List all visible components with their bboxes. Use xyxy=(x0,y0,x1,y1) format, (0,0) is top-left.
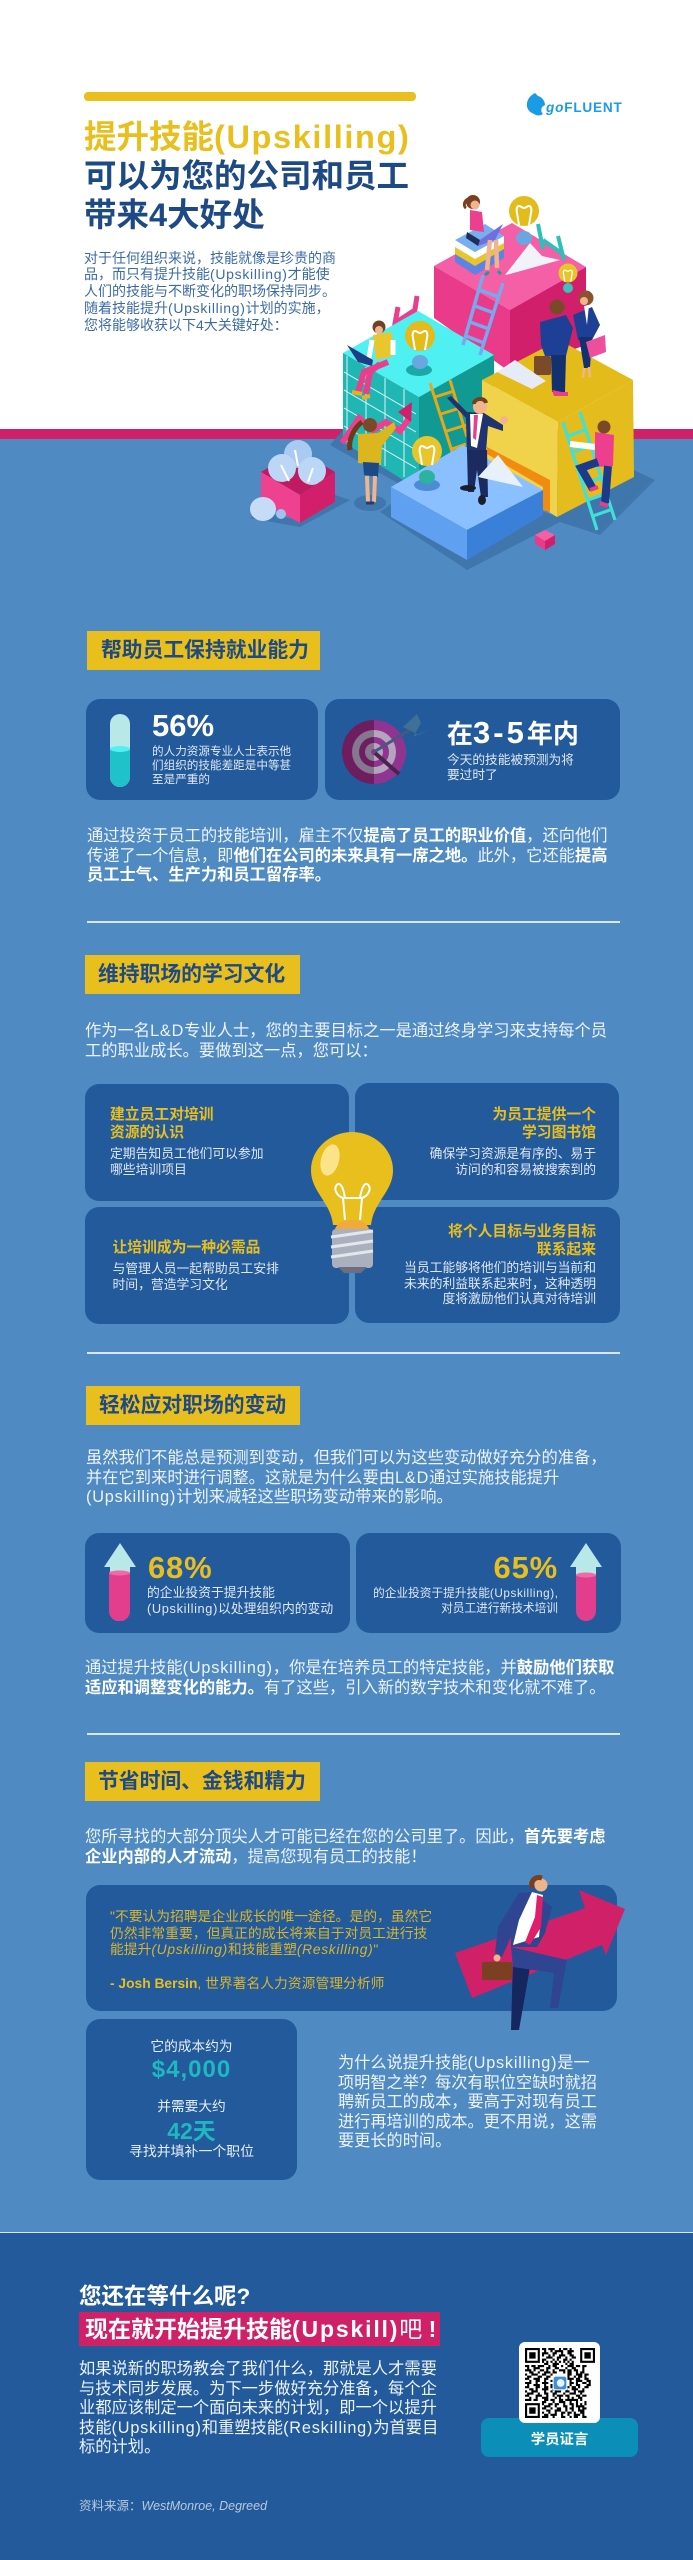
yellow title bar xyxy=(84,92,416,101)
intro text: 您将能够收获以下4大关键好处： xyxy=(84,317,288,333)
footer panel xyxy=(0,2232,693,2560)
card heading xyxy=(492,1106,596,1141)
paragraph xyxy=(85,1658,614,1697)
hero illustration: isometric blocks with people xyxy=(250,195,655,570)
title xyxy=(84,118,410,232)
teal ladder on pink cube xyxy=(538,224,564,260)
stat description xyxy=(152,745,291,786)
person: presenter in navy suit xyxy=(447,396,508,505)
person: two colleagues shaking hands xyxy=(534,290,606,396)
heading: 帮助员工保持就业能力 xyxy=(101,639,309,662)
card: library xyxy=(355,1083,619,1200)
paragraph xyxy=(85,1828,606,1866)
paragraph: 并在它到来时进行调整。这就是为什么要由L&D通过实施技能提升 xyxy=(86,1469,559,1487)
paragraph: 工的职业成长。要做到这一点，您可以： xyxy=(85,1042,378,1060)
card text: 时间，营造学习文化 xyxy=(112,1276,228,1292)
heading: 维持职场的学习文化 xyxy=(98,963,285,986)
icon: arrow gauge xyxy=(104,1543,136,1621)
card: necessity xyxy=(85,1207,349,1324)
icon: arrow gauge xyxy=(570,1543,602,1621)
card heading: 联系起来 xyxy=(537,1242,596,1258)
stat value: 56% xyxy=(152,708,214,743)
footer heading: 您还在等什么呢? xyxy=(79,2284,250,2309)
cost label: 它的成本约为 xyxy=(150,2039,233,2054)
stat card: 68% xyxy=(85,1533,350,1633)
paragraph: 通过提升技能(Upskilling)，你是在培养员工的特定技能，并鼓励他们获取 xyxy=(85,1659,614,1677)
paper plane on pink cube xyxy=(505,243,560,275)
paragraph: 进行再培训的成本。更不用说，这需 xyxy=(338,2113,597,2131)
button: testimonial: 学员证言 xyxy=(531,2432,588,2448)
call to action: 现在就开始提升技能(Upskill)吧 ! xyxy=(85,2316,436,2342)
card text: 确保学习资源是有序的、易于 xyxy=(430,1146,596,1161)
pink ladder behind teal cube xyxy=(394,296,417,329)
pink box with bulbs xyxy=(250,440,335,523)
quote text: 仍然非常重要，但真正的成长将来自于对员工进行技 xyxy=(110,1926,427,1940)
paragraph: 作为一名L&D专业人士，您的主要目标之一是通过终身学习来支持每个员 xyxy=(85,1022,607,1040)
button: testimonial xyxy=(481,2418,638,2457)
card heading: 将个人目标与业务目标 xyxy=(448,1224,596,1240)
paragraph: 通过投资于员工的技能培训，雇主不仅提高了员工的职业价值，还向他们 xyxy=(87,827,608,845)
card text xyxy=(430,1146,596,1176)
paragraph xyxy=(338,2054,597,2150)
paragraph xyxy=(86,1448,606,1506)
stat description xyxy=(373,1586,558,1614)
small pink cube xyxy=(535,530,555,550)
icon: target with arrow xyxy=(342,714,427,784)
illustration: businessman with arrow xyxy=(455,1875,625,2030)
icon: light bulb xyxy=(311,1132,393,1273)
card heading xyxy=(448,1223,596,1258)
teal cube xyxy=(343,311,494,490)
stat description xyxy=(447,752,574,782)
paragraph xyxy=(85,1022,607,1060)
books xyxy=(455,224,504,275)
card heading: 让培训成为一种必需品 xyxy=(112,1240,260,1256)
heading: 轻松应对职场的变动 xyxy=(99,1394,286,1417)
intro text xyxy=(84,250,336,333)
paper plane on blue cube xyxy=(478,455,523,487)
heading xyxy=(86,1386,300,1425)
blue ladder xyxy=(463,275,503,355)
footer paragraph xyxy=(79,2360,438,2456)
cyan ladder xyxy=(563,412,615,530)
blue cube xyxy=(391,445,543,560)
quote text xyxy=(110,1909,432,1957)
stat description: 们组织的技能差距是中等甚 xyxy=(152,759,291,772)
footer paragraph: 业都应该制定一个面向未来的计划，即一个以提升 xyxy=(79,2399,437,2417)
time description: 寻找并填补一个职位 xyxy=(129,2143,254,2159)
intro text: 对于任何组织来说，技能就像是珍贵的商 xyxy=(84,250,336,266)
heading xyxy=(87,631,320,670)
heading: 节省时间、金钱和精力 xyxy=(98,1770,306,1793)
card heading: 资源的认识 xyxy=(110,1125,184,1141)
stat description: 的人力资源专业人士表示他 xyxy=(152,745,291,758)
bulbs xyxy=(405,196,578,491)
paragraph: 企业内部的人才流动，提高您现有员工的技能！ xyxy=(85,1848,427,1866)
stat description: (Upskilling)以处理组织内的变动 xyxy=(147,1600,333,1616)
open book xyxy=(497,360,546,389)
paragraph: 传递了一个信息，即他们在公司的未来具有一席之地。此外，它还能提高 xyxy=(87,847,608,865)
pink cube xyxy=(434,223,586,372)
section 1: employability xyxy=(86,631,620,884)
footer paragraph: 与技术同步发展。为下一步做好充分准备，每个企 xyxy=(79,2380,437,2398)
pink band xyxy=(0,429,693,439)
card text: 度将激励他们认真对待培训 xyxy=(442,1291,596,1306)
card text xyxy=(404,1260,596,1306)
ground shadows xyxy=(250,430,655,570)
stat description: 今天的技能被预测为将 xyxy=(447,752,574,766)
chart arrow xyxy=(342,402,412,443)
section 4: save time and money xyxy=(85,1762,625,2180)
card text: 定期告知员工他们可以参加 xyxy=(110,1146,264,1161)
stat description: 对员工进行新技术培训 xyxy=(441,1602,558,1614)
cost card xyxy=(86,2019,297,2180)
paragraph: 适应和调整变化的能力。有了这些，引入新的数字技术和变化就不难了。 xyxy=(85,1679,606,1697)
stat description: 要过时了 xyxy=(447,768,498,782)
stat card: 3-5 years xyxy=(325,699,620,800)
person: man climbing ladder xyxy=(570,420,614,506)
logo: goFLUENT xyxy=(526,93,623,116)
stat description: 的企业投资于提升技能 xyxy=(147,1585,275,1600)
intro text: 随着技能提升(Upskilling)计划的实施， xyxy=(84,300,330,316)
stat value: 65% xyxy=(494,1550,558,1585)
header panel: white background xyxy=(0,0,693,429)
paragraph: 项明智之举？每次有职位空缺时就招 xyxy=(338,2074,597,2092)
time label: 并需要大约 xyxy=(157,2099,226,2114)
card heading: 为员工提供一个 xyxy=(492,1107,596,1123)
card: awareness xyxy=(85,1084,349,1201)
card text: 访问的和容易被搜索到的 xyxy=(455,1162,596,1176)
title: 带来4大好处 xyxy=(84,196,265,232)
paragraph: (Upskilling)计划来减轻这些职场变动带来的影响。 xyxy=(86,1488,453,1506)
logo: goFLUENT: goFLUENT xyxy=(546,100,623,115)
paragraph: 您所寻找的大部分顶尖人才可能已经在您的公司里了。因此，首先要考虑 xyxy=(85,1828,606,1846)
title: 可以为您的公司和员工 xyxy=(84,158,409,194)
quote text: "不要认为招聘是企业成长的唯一途径。是的，虽然它 xyxy=(110,1909,432,1924)
card heading: 建立员工对培训 xyxy=(110,1107,214,1123)
paragraph: 为什么说提升技能(Upskilling)是一 xyxy=(338,2054,590,2072)
quote text: 能提升(Upskilling)和技能重塑(Reskilling)" xyxy=(110,1942,378,1957)
source: 资料来源：WestMonroe, Degreed xyxy=(79,2499,267,2513)
heading xyxy=(85,955,300,994)
paragraph: 要更长的时间。 xyxy=(338,2132,451,2150)
stat description: 的企业投资于提升技能(Upskilling), xyxy=(373,1586,558,1600)
person: woman pointing at chart xyxy=(350,418,396,503)
section 3: workplace change xyxy=(85,1386,621,1697)
card text: 哪些培训项目 xyxy=(110,1162,187,1176)
card heading xyxy=(110,1106,214,1141)
icon: thermometer gauge xyxy=(110,714,130,787)
footer paragraph: 如果说新的职场教会了我们什么，那就是人才需要 xyxy=(79,2360,437,2378)
card text xyxy=(112,1261,279,1292)
heading xyxy=(85,1762,320,1801)
quote card xyxy=(86,1885,617,2011)
yellow cube xyxy=(482,340,634,517)
card: goals xyxy=(355,1207,620,1323)
stat value: 在3-5年内 xyxy=(447,715,579,750)
person: man on teal cube with laptop xyxy=(347,320,393,398)
footer paragraph: 标的计划。 xyxy=(79,2438,160,2456)
time value: 42天 xyxy=(167,2118,216,2144)
stat value: 68% xyxy=(148,1550,212,1585)
card text: 当员工能够将他们的培训与当前和 xyxy=(404,1260,596,1275)
stat card: 65% xyxy=(356,1533,621,1633)
paragraph: 聘新员工的成本，要高于对现有员工 xyxy=(338,2093,597,2111)
title: 提升技能(Upskilling) xyxy=(84,118,410,154)
stat card: 56% xyxy=(86,699,318,800)
footer paragraph: 技能(Upskilling)和重塑技能(Reskilling)为首要目 xyxy=(79,2419,438,2437)
stat description: 至是严重的 xyxy=(152,773,210,786)
card text: 与管理人员一起帮助员工安排 xyxy=(112,1261,279,1276)
card text xyxy=(110,1146,264,1176)
quote attribution: - Josh Bersin, 世界著名人力资源管理分析师 xyxy=(110,1976,384,1991)
paragraph: 虽然我们不能总是预测到变动，但我们可以为这些变动做好充分的准备， xyxy=(86,1449,606,1467)
intro text: 人们的技能与不断变化的职场保持同步。 xyxy=(84,283,336,299)
paragraph: 员工士气、生产力和员工留存率。 xyxy=(87,866,331,884)
QR code xyxy=(519,2342,600,2423)
section 2: learning culture xyxy=(85,955,620,1324)
cost value: $4,000 xyxy=(152,2056,231,2083)
card heading: 学习图书馆 xyxy=(522,1125,596,1141)
yellow ladder xyxy=(430,380,467,467)
intro text: 品，而只有提升技能(Upskilling)才能使 xyxy=(84,266,330,282)
person: woman on books xyxy=(464,195,503,275)
card text: 未来的利益联系起来时，这种透明 xyxy=(404,1276,596,1290)
paragraph xyxy=(87,826,608,884)
stat description xyxy=(147,1585,333,1616)
